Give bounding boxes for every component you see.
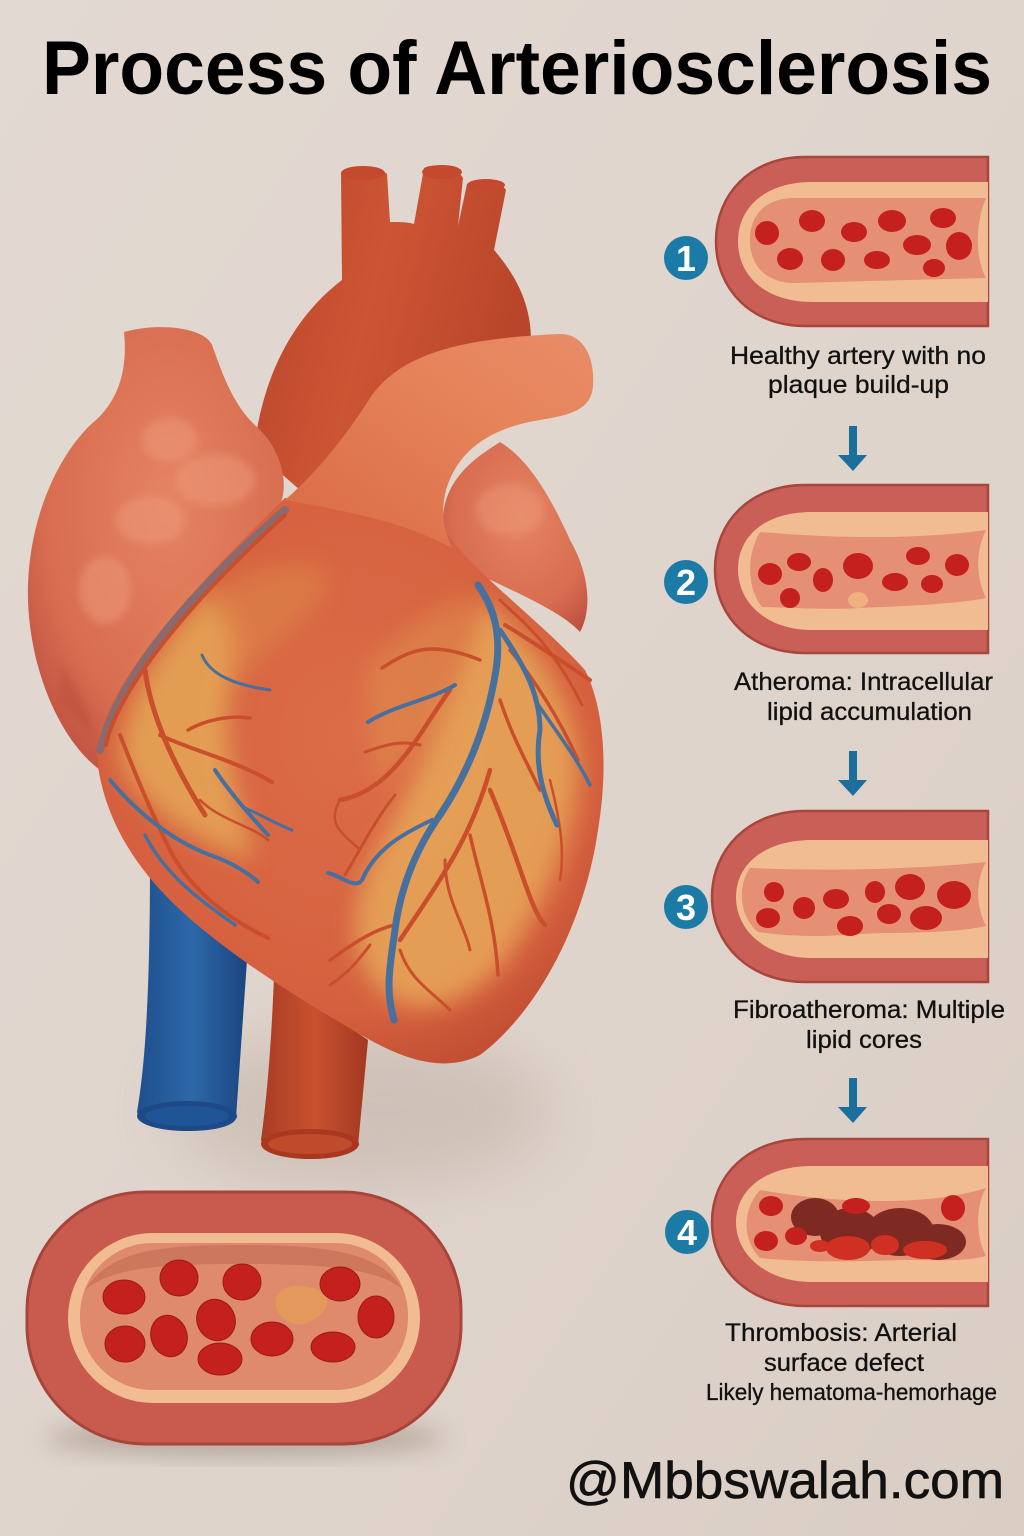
red blood cells bbox=[754, 1195, 965, 1251]
step 4 caption: surface defect bbox=[764, 1349, 924, 1377]
red artery tube bbox=[261, 975, 368, 1159]
heart illustration bbox=[28, 165, 604, 1159]
step 3 caption: lipid cores bbox=[806, 1026, 922, 1054]
step 3 artery: fibroatheroma bbox=[712, 811, 988, 982]
coronary arteries bbox=[100, 510, 590, 1010]
plaque deposit bbox=[276, 1286, 327, 1325]
coronary veins bbox=[110, 585, 590, 1020]
thrombus bbox=[791, 1198, 966, 1260]
aorta arch bbox=[254, 165, 531, 490]
step 4 artery: thrombosis bbox=[712, 1139, 988, 1306]
step 1 caption: plaque build-up bbox=[768, 371, 949, 399]
blue vein tube bbox=[137, 860, 247, 1131]
step 2 badge bbox=[664, 560, 708, 604]
step 3 badge: 3 bbox=[676, 887, 696, 928]
step 2 badge: 2 bbox=[676, 562, 696, 603]
red blood cells bbox=[758, 547, 969, 608]
red blood cells bbox=[755, 208, 972, 277]
step 4 badge bbox=[665, 1210, 709, 1254]
step 1 caption bbox=[730, 342, 986, 399]
watermark: @Mbbswalah.com bbox=[566, 1452, 1004, 1510]
red blood cells bbox=[103, 1260, 394, 1375]
lipid deposit bbox=[848, 592, 868, 608]
step 3 badge bbox=[664, 885, 708, 929]
step 2 caption: lipid accumulation bbox=[767, 698, 972, 726]
step 3 caption bbox=[733, 996, 1005, 1054]
left atrium bbox=[443, 442, 587, 632]
step 4 caption bbox=[706, 1319, 997, 1405]
step 1 badge bbox=[664, 236, 708, 280]
arrow 3 to 4 bbox=[838, 1078, 867, 1123]
step 1 artery: healthy bbox=[716, 157, 988, 326]
right atrium bbox=[28, 327, 284, 770]
cross-section of artery with plaque bbox=[27, 1192, 461, 1444]
step 4 badge: 4 bbox=[677, 1212, 697, 1253]
step 3 caption: Fibroatheroma: Multiple bbox=[733, 996, 1005, 1024]
red blood cells bbox=[756, 874, 971, 936]
step 2 artery: atheroma bbox=[715, 485, 988, 653]
step 4 caption: Likely hematoma-hemorhage bbox=[706, 1379, 997, 1405]
title: Process of Arteriosclerosis bbox=[42, 26, 992, 111]
arrow 1 to 2 bbox=[838, 426, 867, 471]
ventricles bbox=[96, 498, 604, 1063]
step 1 caption: Healthy artery with no bbox=[730, 342, 986, 370]
arrow 2 to 3 bbox=[838, 751, 867, 796]
step 2 caption bbox=[734, 668, 993, 726]
step 1 badge: 1 bbox=[676, 238, 696, 279]
pulmonary artery bbox=[285, 334, 593, 548]
step 2 caption: Atheroma: Intracellular bbox=[734, 668, 993, 696]
step 4 caption: Thrombosis: Arterial bbox=[725, 1319, 957, 1347]
